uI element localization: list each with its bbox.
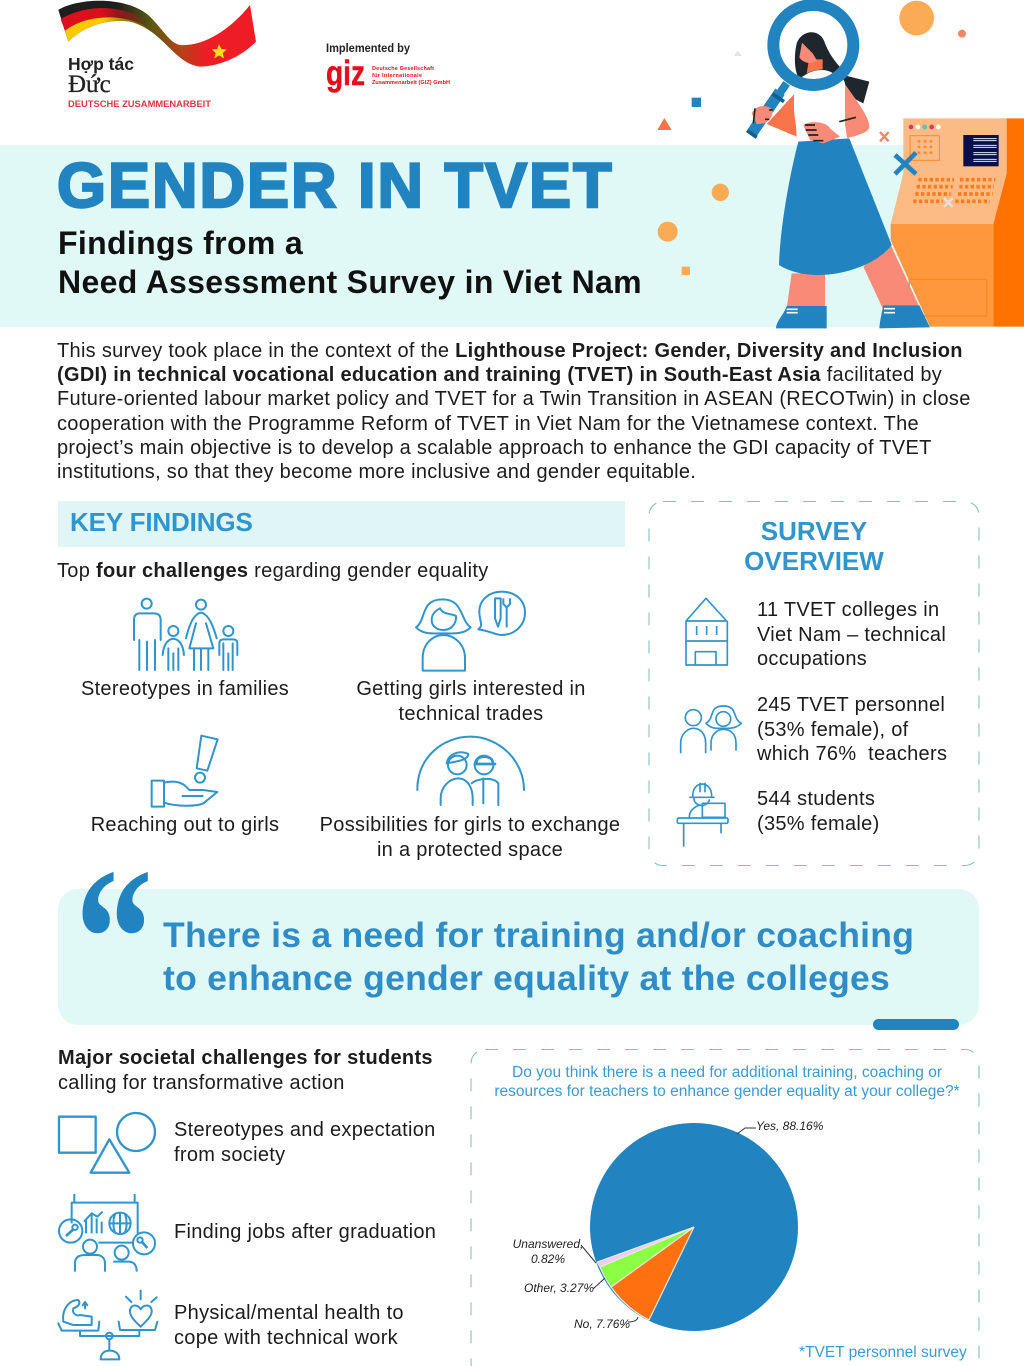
banner band xyxy=(0,145,1024,327)
icon: family xyxy=(134,599,237,670)
logo: Hop tac Duc: Hợp tác xyxy=(68,54,134,74)
label: protected space: in a protected space xyxy=(377,839,563,861)
quote panel xyxy=(58,889,979,1025)
chart question: Do you think there is a need for additional training, coaching or xyxy=(512,1064,942,1081)
icon: shapes xyxy=(59,1113,155,1173)
intro text: project’s main objective is to develop a scalable approach to enhance the GDI capacity of TVET xyxy=(57,437,932,459)
key findings heading: KEY FINDINGS xyxy=(70,507,253,537)
survey overview heading: SURVEY xyxy=(761,516,867,546)
logo: Hop tac Duc: Đức xyxy=(68,71,111,98)
logo: Hop tac Duc xyxy=(58,1,256,110)
survey overview frame xyxy=(649,502,979,866)
pie label: unanswered: Unanswered, xyxy=(513,1237,583,1251)
survey overview heading xyxy=(744,516,884,576)
label: getting girls interested: technical trades xyxy=(399,703,543,725)
chart question: resources for teachers to enhance gender equality at your college?* xyxy=(494,1083,960,1100)
survey: colleges: occupations xyxy=(757,648,867,670)
footnote: *TVET personnel survey xyxy=(799,1344,967,1361)
quote text xyxy=(163,915,914,998)
intro text: This survey took place in the context of the Lighthouse Project: Gender, Diversity and Inclusion xyxy=(57,340,963,362)
societal: health: cope with technical work xyxy=(174,1327,398,1349)
survey: personnel: (53% female), of xyxy=(757,719,909,741)
survey: personnel: which 76% teachers xyxy=(757,743,947,765)
icon: building xyxy=(686,598,727,665)
intro text: cooperation with the Programme Reform of TVET in Viet Nam for the Vietnamese context. The xyxy=(57,413,919,435)
intro text: institutions, so that they become more inclusive and gender equitable. xyxy=(57,461,696,483)
icon: balance of body and heart xyxy=(58,1291,157,1359)
label: protected space xyxy=(320,814,620,861)
icon: two people under dome xyxy=(417,737,524,805)
societal challenges heading: calling for transformative action xyxy=(58,1072,345,1094)
logo: GIZ: für Internationale xyxy=(372,73,422,79)
societal: stereotypes: Stereotypes and expectation xyxy=(174,1119,436,1141)
label: reaching out: Reaching out to girls xyxy=(91,814,279,836)
survey: personnel: 245 TVET personnel xyxy=(757,694,945,716)
label: getting girls interested xyxy=(356,678,586,725)
chart frame xyxy=(471,1050,979,1366)
survey: personnel xyxy=(757,694,947,765)
subtitle: Findings from a xyxy=(58,225,303,261)
challenges subheading: Top four challenges regarding gender equality xyxy=(57,560,489,582)
label: stereotypes in families: Stereotypes in families xyxy=(81,678,289,700)
logo: GIZ: Zusammenarbeit (GIZ) GmbH xyxy=(372,80,450,86)
societal challenges heading xyxy=(58,1046,433,1094)
societal: health: Physical/mental health to xyxy=(174,1302,404,1324)
pie label: other: Other, 3.27% xyxy=(524,1281,594,1295)
title: GENDER IN TVET xyxy=(57,151,614,221)
icon: girl with tools xyxy=(416,592,525,671)
logo: GIZ: giz xyxy=(326,54,365,93)
pie label: unanswered xyxy=(513,1237,583,1266)
chart question xyxy=(494,1064,960,1100)
illustration: woman with magnifier and machine xyxy=(657,1,1024,328)
pie label: unanswered: 0.82% xyxy=(531,1252,565,1266)
logo: Hop tac Duc: DEUTSCHE ZUSAMMENARBEIT xyxy=(68,99,211,110)
survey: colleges: Viet Nam – technical xyxy=(757,624,946,646)
quote accent bar xyxy=(873,1019,959,1030)
intro text xyxy=(57,340,971,483)
icon: student at desk xyxy=(677,783,728,846)
survey overview heading: OVERVIEW xyxy=(744,546,884,576)
societal challenges heading: Major societal challenges for students xyxy=(58,1046,433,1068)
logo: GIZ: Implemented by xyxy=(326,41,410,55)
subtitle: Need Assessment Survey in Viet Nam xyxy=(58,264,642,300)
label: getting girls interested: Getting girls interested in xyxy=(356,678,586,700)
pie chart xyxy=(581,1123,798,1331)
icon: personnel xyxy=(681,706,741,753)
key findings band xyxy=(58,501,625,547)
pie label: yes: Yes, 88.16% xyxy=(756,1119,823,1133)
quote text: There is a need for training and/or coaching xyxy=(163,915,914,955)
societal: stereotypes: from society xyxy=(174,1144,285,1166)
survey: students xyxy=(757,788,880,835)
survey: colleges: 11 TVET colleges in xyxy=(757,599,939,621)
societal: jobs: Finding jobs after graduation xyxy=(174,1221,436,1243)
societal: stereotypes xyxy=(174,1119,436,1166)
quote text: to enhance gender equality at the colleges xyxy=(163,958,890,998)
intro text: (GDI) in technical vocational education and training (TVET) in South-East Asia facilitated by xyxy=(57,364,942,386)
societal: health xyxy=(174,1302,404,1349)
subtitle xyxy=(58,225,642,300)
icon: hand and exclamation mark xyxy=(152,736,218,807)
label: protected space: Possibilities for girls to exchange xyxy=(320,814,620,836)
intro text: Future-oriented labour market policy and TVET for a Twin Transition in ASEAN (RECOTwin) in close xyxy=(57,388,971,410)
survey: students: 544 students xyxy=(757,788,875,810)
pie label: no: No, 7.76% xyxy=(574,1317,630,1331)
icon: jobs presentation xyxy=(59,1194,155,1272)
survey: colleges xyxy=(757,599,946,670)
survey: students: (35% female) xyxy=(757,813,880,835)
logo: GIZ: Deutsche Gesellschaft xyxy=(372,66,434,72)
logo: GIZ xyxy=(326,41,450,93)
